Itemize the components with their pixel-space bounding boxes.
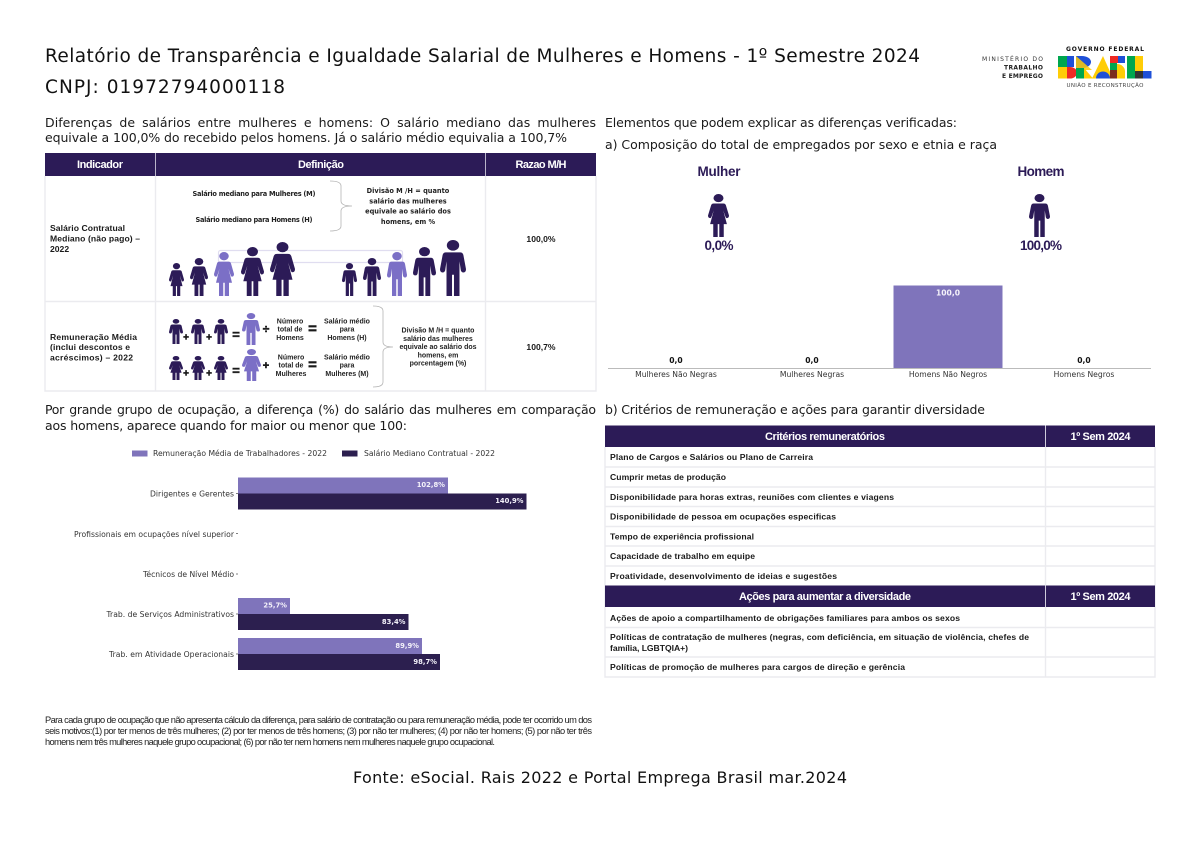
logo: governo federal brasil bbox=[1058, 46, 1152, 89]
bar chart: ocupação: 25,7% bbox=[263, 602, 287, 610]
formula: mulheres: = bbox=[232, 363, 240, 378]
title: CNPJ: 01972794000118 bbox=[45, 77, 285, 98]
rows: critérios: Capacidade de trabalho em equipe bbox=[610, 551, 755, 561]
rows: critérios: Tempo de experiência profissional bbox=[610, 532, 754, 542]
formula: mulheres: + bbox=[206, 368, 212, 380]
bar chart: ocupação: Dirigentes e Gerentes bbox=[150, 490, 234, 498]
logo: governo federal brasil: GOVERNO FEDERAL bbox=[1066, 46, 1144, 53]
bar chart: ocupação: Trab. de Serviços Administrativos bbox=[106, 610, 234, 619]
intro paragraph: Diferenças de salários entre mulheres e homens: O salário mediano das mulheres bbox=[45, 115, 596, 130]
row: salário contratual mediano: equivale ao salário dos bbox=[365, 208, 451, 216]
formula: mulheres: Número bbox=[278, 354, 304, 362]
rows: ações bbox=[610, 613, 1029, 672]
panel: mulher bbox=[698, 164, 741, 253]
bar chart: composição: Mulheres Não Negras bbox=[635, 370, 717, 379]
intro paragraph: equivale a 100,0% do recebido pelos homens. Já o salário médio equivalia a 100,7% bbox=[45, 130, 567, 145]
rows: critérios: Disponibilidade para horas extras, reuniões com clientes e viagens bbox=[610, 492, 894, 502]
table header bbox=[45, 153, 596, 176]
row: remuneração média: Remuneração Média bbox=[50, 332, 137, 342]
formula: homens: total de bbox=[278, 326, 303, 334]
row: salário contratual mediano: Mediano (não pago) – bbox=[50, 234, 140, 244]
bar chart: composição: Mulheres Negras bbox=[780, 370, 844, 379]
icon: woman bbox=[708, 194, 729, 237]
row: salário contratual mediano: salário das mulheres bbox=[369, 198, 447, 206]
footnote: Para cada grupo de ocupação que não apresenta cálculo da diferença, para salário de contratação ou para remuneração média, pode ter ocorrido um dos bbox=[45, 715, 592, 725]
bar chart: composição: Homens Não Negros bbox=[909, 370, 987, 379]
occupation paragraph: aos homens, aparece quando for maior ou menor que 100: bbox=[45, 418, 407, 433]
row: salário contratual mediano: Salário mediano para Homens (H) bbox=[196, 216, 312, 224]
table header: Indicador bbox=[77, 159, 124, 171]
logo: ministério: MINISTÉRIO DO bbox=[982, 55, 1043, 63]
formula: mulheres: para bbox=[340, 362, 354, 370]
heading: critérios: b) Critérios de remuneração e ações para garantir diversidade bbox=[605, 402, 985, 417]
rows: critérios: Proatividade, desenvolvimento de ideias e sugestões bbox=[610, 571, 837, 581]
bar chart: composição: 0,0 bbox=[805, 356, 819, 365]
bar chart: composição: Homens Negros bbox=[1054, 370, 1114, 379]
rows: ações: Políticas de promoção de mulheres para cargos de direção e gerência bbox=[610, 662, 905, 672]
row: remuneração média: salário das mulheres bbox=[403, 336, 473, 343]
footnote bbox=[45, 715, 592, 747]
rows: critérios: Plano de Cargos e Salários ou Plano de Carreira bbox=[610, 452, 813, 462]
bar chart: ocupação: Técnicos de Nível Médio bbox=[142, 570, 234, 579]
row: salário contratual mediano bbox=[50, 181, 556, 296]
rows: critérios bbox=[610, 452, 894, 581]
formula: mulheres bbox=[169, 349, 370, 381]
rows: ações: Políticas de contratação de mulheres (negras, com deficiência, em situação de violência, chefes de bbox=[610, 632, 1029, 642]
legend bbox=[132, 449, 495, 458]
table header: Definição bbox=[298, 159, 344, 171]
footnote: homens nem três mulheres naquele grupo ocupacional; (6) por não ter nem homens nem mulheres naquele grupo ocupacional. bbox=[45, 737, 495, 747]
row: remuneração média bbox=[50, 306, 556, 387]
formula: mulheres: Mulheres (M) bbox=[325, 371, 369, 378]
icons: women bbox=[169, 242, 295, 296]
formula: homens: Homens bbox=[276, 335, 304, 342]
row: salário contratual mediano: 100,0% bbox=[526, 234, 556, 244]
row: salário contratual mediano: homens, em % bbox=[381, 218, 436, 226]
bar chart: composição: 0,0 bbox=[1077, 356, 1091, 365]
bar chart: ocupação: 140,9% bbox=[495, 497, 524, 505]
formula: homens: Número bbox=[277, 318, 303, 326]
formula: mulheres: total de bbox=[279, 362, 304, 370]
rows: ações: Ações de apoio a compartilhamento de obrigações familiares para ambos os sexos bbox=[610, 613, 960, 623]
table header: Razao M/H bbox=[516, 159, 567, 171]
bar chart: ocupação: 102,8% bbox=[417, 481, 445, 489]
row: remuneração média: equivale ao salário dos bbox=[399, 344, 477, 351]
bar chart: ocupação: 98,7% bbox=[413, 658, 437, 666]
panel: mulher: Mulher bbox=[698, 164, 741, 179]
header: ações: 1º Sem 2024 bbox=[1070, 591, 1131, 603]
logo: ministério: E EMPREGO bbox=[1002, 73, 1043, 80]
bar chart: composição bbox=[608, 286, 1151, 379]
legend: Salário Mediano Contratual - 2022 bbox=[364, 449, 495, 458]
formula: homens: + bbox=[206, 332, 212, 344]
rows: critérios: Cumprir metas de produção bbox=[610, 472, 726, 482]
rows: critérios: Disponibilidade de pessoa em ocupações especificas bbox=[610, 512, 836, 522]
panel: homem: Homem bbox=[1018, 164, 1064, 179]
row: remuneração média: porcentagem (%) bbox=[410, 360, 466, 368]
heading: composição: a) Composição do total de empregados por sexo e etnia e raça bbox=[605, 137, 997, 152]
bar chart: composição: 100,0 bbox=[936, 288, 960, 298]
formula: homens: ÷ bbox=[263, 322, 270, 336]
row: salário contratual mediano: 2022 bbox=[50, 244, 69, 254]
formula: mulheres: Salário médio bbox=[324, 354, 370, 362]
bar chart: ocupação: 89,9% bbox=[395, 642, 419, 650]
panel: homem bbox=[1018, 164, 1064, 253]
occupation paragraph bbox=[45, 402, 596, 433]
icon: man bbox=[1029, 194, 1050, 237]
formula: homens: + bbox=[183, 332, 189, 344]
icons: men bbox=[342, 240, 466, 296]
source: Fonte: eSocial. Rais 2022 e Portal Emprega Brasil mar.2024 bbox=[353, 768, 847, 787]
bar chart: ocupação bbox=[74, 478, 526, 670]
formula: homens: Homens (H) bbox=[327, 335, 367, 342]
bar chart: ocupação: 83,4% bbox=[382, 618, 406, 626]
header: critérios remuneratórios: Critérios remuneratórios bbox=[765, 431, 885, 443]
formula: homens: = bbox=[308, 320, 317, 338]
formula: mulheres: + bbox=[263, 360, 269, 372]
formula: mulheres: = bbox=[308, 356, 317, 374]
row: salário contratual mediano: Salário mediano para Mulheres (M) bbox=[192, 190, 316, 198]
row: remuneração média: acréscimos) – 2022 bbox=[50, 352, 133, 362]
row: remuneração média: homens, em bbox=[418, 352, 458, 360]
row: remuneração média: (inclui descontos e bbox=[50, 342, 130, 352]
formula: homens: = bbox=[232, 327, 240, 342]
logo: governo federal brasil: UNIÃO E RECONSTRUÇÃO bbox=[1066, 82, 1144, 89]
rows: ações: família, LGBTQIA+) bbox=[610, 643, 688, 653]
heading: elementos: Elementos que podem explicar as diferenças verificadas: bbox=[605, 115, 957, 130]
panel: mulher: 0,0% bbox=[704, 238, 734, 253]
row: remuneração média: 100,7% bbox=[526, 342, 556, 352]
logo: ministério: TRABALHO bbox=[1004, 64, 1043, 72]
formula: mulheres: Mulheres bbox=[276, 371, 306, 378]
row: salário contratual mediano: Salário Contratual bbox=[50, 223, 125, 233]
formula: homens: Salário médio bbox=[324, 318, 370, 326]
footnote: seis motivos:(1) por ter menos de três mulheres; (2) por ter menos de três homens; (3) por não ter mulheres; (4) por não ter homens; (5) por não ter três bbox=[45, 726, 592, 736]
header: critérios remuneratórios: 1º Sem 2024 bbox=[1070, 431, 1131, 443]
row: remuneração média: Divisão M /H = quanto bbox=[402, 328, 474, 334]
formula: homens: para bbox=[340, 326, 354, 334]
row: salário contratual mediano: Divisão M /H = quanto bbox=[367, 187, 450, 195]
header: ações: Ações para aumentar a diversidade bbox=[739, 591, 911, 603]
legend: Remuneração Média de Trabalhadores - 2022 bbox=[153, 449, 327, 458]
panel: homem: 100,0% bbox=[1020, 238, 1062, 253]
connector bbox=[218, 250, 402, 262]
title: Relatório de Transparência e Igualdade Salarial de Mulheres e Homens - 1º Semestre 2024 bbox=[45, 46, 920, 67]
formula: mulheres: + bbox=[183, 368, 189, 380]
header: ações bbox=[605, 586, 1155, 607]
panel: indicator table bbox=[45, 153, 596, 391]
bar chart: composição: 0,0 bbox=[669, 356, 683, 365]
header: critérios remuneratórios bbox=[605, 426, 1155, 447]
formula: homens bbox=[169, 313, 370, 345]
logo: ministério bbox=[982, 55, 1043, 80]
bar chart: ocupação: Trab. em Atividade Operacionais bbox=[108, 650, 234, 659]
panel: critérios table bbox=[605, 426, 1155, 677]
title bbox=[45, 46, 920, 98]
intro paragraph bbox=[45, 115, 596, 145]
bar chart: ocupação: Profissionais em ocupações nível superior bbox=[74, 530, 235, 539]
occupation paragraph: Por grande grupo de ocupação, a diferença (%) do salário das mulheres em comparação bbox=[45, 402, 596, 417]
